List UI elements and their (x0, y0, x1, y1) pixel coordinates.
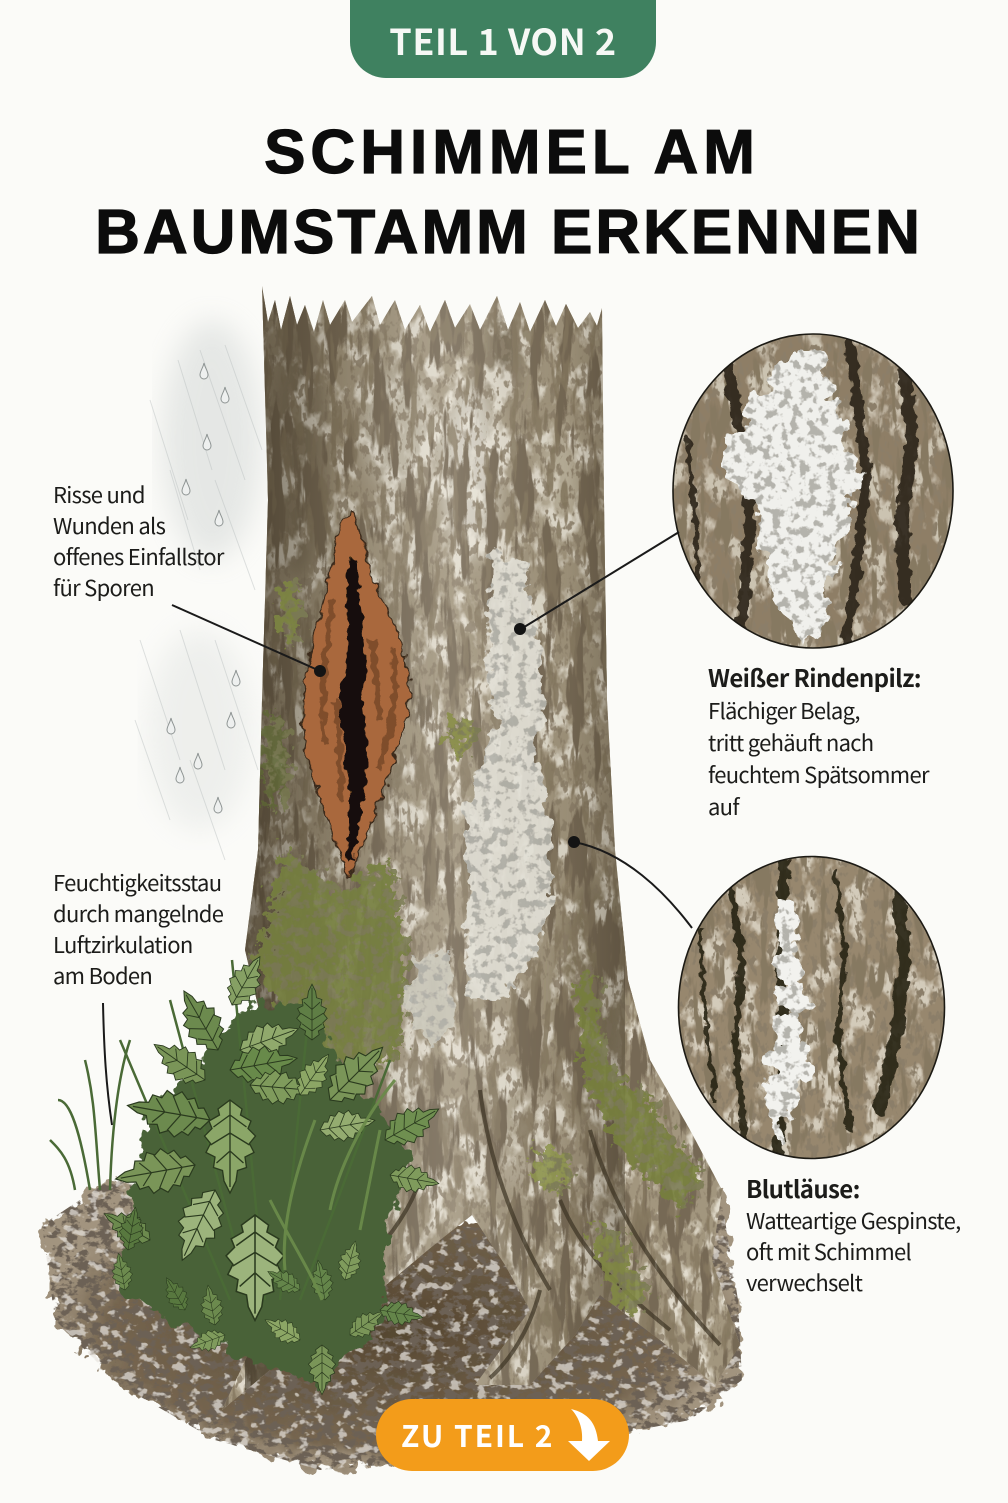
label: woolly aphids: Watteartige Gespinste, (746, 1204, 960, 1236)
aphid wool (763, 899, 813, 1140)
label: cracks and wounds: Risse und (53, 478, 145, 510)
trunk (200, 280, 760, 1420)
icon: curved arrow down (568, 1409, 610, 1461)
soil dark speckle (30, 1180, 750, 1475)
label: moisture buildup (53, 866, 223, 991)
leader line: moisture (103, 1003, 112, 1125)
label: white bark fungus (708, 659, 930, 822)
label: moisture buildup: am Boden (53, 959, 152, 991)
circle bark thin cracks (681, 857, 942, 1158)
soil light speckle (30, 1180, 750, 1475)
white fungus patch on trunk (405, 550, 552, 1050)
leader line: white fungus (514, 532, 679, 635)
wound in the bark (302, 512, 409, 878)
label: white bark fungus: auf (708, 790, 739, 822)
title: BAUMSTAMM ERKENNEN (95, 198, 923, 267)
label: moisture buildup: Luftzirkulation (53, 928, 193, 960)
detail circle: woolly aphids (670, 850, 955, 1165)
dark foliage mass (120, 1000, 410, 1385)
label: woolly aphids: verwechselt (746, 1266, 862, 1298)
label: moisture buildup: Feuchtigkeitsstau (53, 866, 221, 898)
label: moisture buildup: durch mangelnde (53, 897, 223, 929)
bark fine texture (222, 290, 735, 1410)
label: woolly aphids: Blutläuse: (746, 1170, 860, 1205)
label: white bark fungus: Weißer Rindenpilz: (708, 659, 921, 694)
tonal variation (260, 290, 620, 1190)
badge: part 1 of 2 (350, 0, 656, 78)
detail circle: white bark fungus (670, 330, 960, 655)
title (95, 118, 923, 267)
badge: part 1 of 2: TEIL 1 VON 2 (389, 14, 617, 66)
label: cracks and wounds: offenes Einfallstor (53, 540, 224, 572)
plants (50, 949, 447, 1395)
label: white bark fungus: feuchtem Spätsommer (708, 758, 929, 790)
bark cracks (200, 280, 760, 1420)
label: cracks and wounds: für Sporen (53, 571, 154, 603)
label: cracks and wounds: Wunden als (53, 509, 165, 541)
circle bark texture (680, 857, 944, 1158)
circle bark highlights (670, 330, 960, 655)
rain drops (167, 363, 240, 813)
circle bark thin cracks (670, 330, 960, 655)
leader line: wound (172, 605, 326, 677)
label: woolly aphids (746, 1170, 960, 1298)
circle bark texture (670, 330, 960, 655)
circle bark highlights (680, 857, 944, 1156)
bark light scales (200, 280, 760, 1420)
rain haze (135, 320, 262, 860)
label: woolly aphids: oft mit Schimmel (746, 1235, 911, 1267)
button text: ZU TEIL 2 (401, 1412, 554, 1456)
button: to part 2 (376, 1399, 629, 1471)
root ridges (388, 1090, 722, 1380)
moss patches (255, 578, 705, 1320)
title: SCHIMMEL AM (264, 118, 760, 187)
bark thin cracks (232, 296, 733, 1402)
lichen (724, 350, 860, 643)
leader line: aphids (568, 836, 692, 928)
label: white bark fungus: tritt gehäuft nach (708, 726, 873, 758)
ground with soil (30, 1180, 750, 1475)
label: white bark fungus: Flächiger Belag, (708, 694, 860, 726)
label: cracks and wounds (53, 478, 224, 603)
